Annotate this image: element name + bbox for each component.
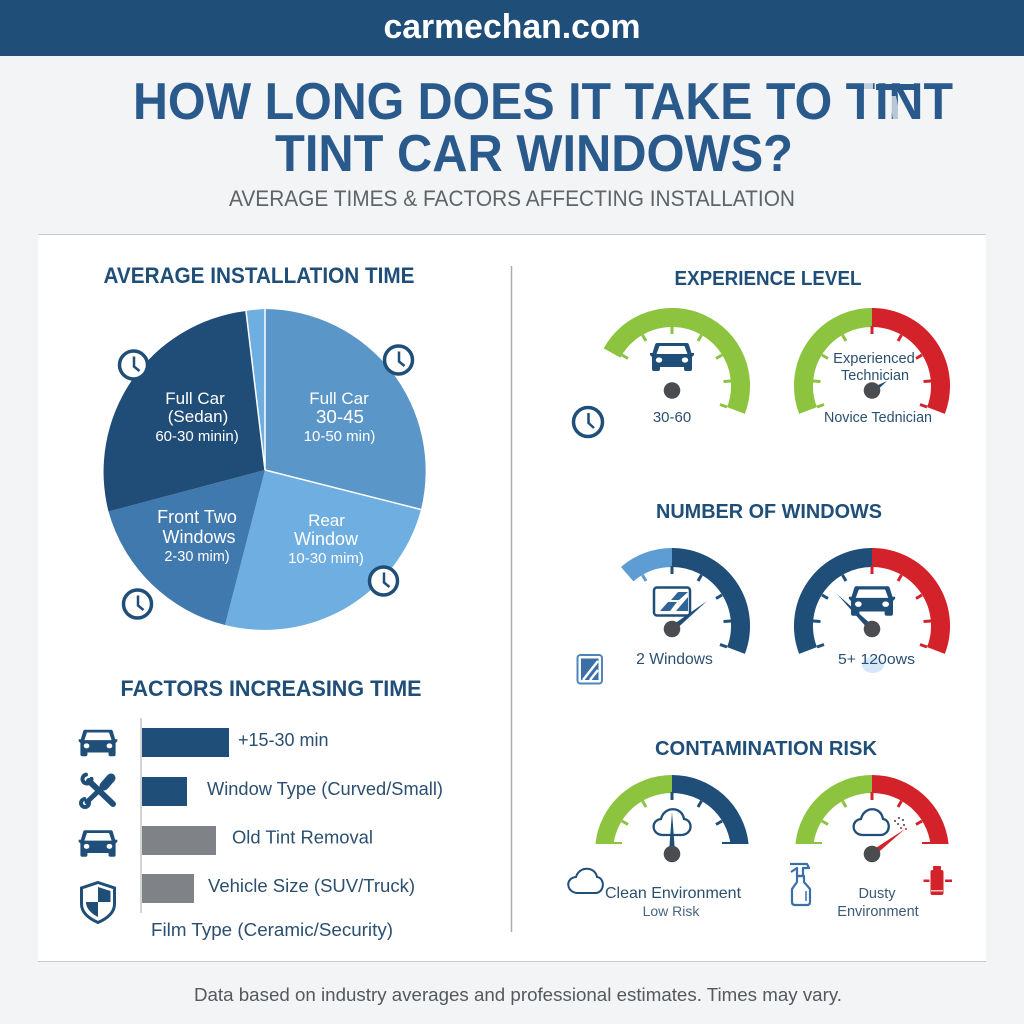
pie chart: 10-30 mim) <box>288 550 364 567</box>
gauge: dusty environment <box>795 775 949 862</box>
label: clean environment: Low Risk <box>643 903 700 919</box>
label: 30-60: 30-60 <box>653 409 691 426</box>
pie chart: Full Car <box>165 389 225 408</box>
icon: spray bottle <box>790 864 810 905</box>
heading: number of windows: NUMBER OF WINDOWS <box>656 501 882 523</box>
subtitle: AVERAGE TIMES & FACTORS AFFECTING INSTALLATION <box>229 186 795 211</box>
pie chart: 10-50 min) <box>304 428 375 445</box>
heading: average installation time: AVERAGE INSTALLATION TIME <box>104 263 414 288</box>
pie chart <box>104 309 426 630</box>
heading: factors increasing time: FACTORS INCREASING TIME <box>120 676 422 701</box>
title: HOW LONG DOES IT TAKE TO TINT <box>133 73 953 131</box>
bar chart: factors: +15-30 min <box>238 730 329 750</box>
bar chart: factors: Old Tint Removal <box>232 828 373 848</box>
label: dusty environment: Dusty <box>858 886 896 902</box>
gauge needle: clean <box>664 812 680 862</box>
pie chart: (Sedan) <box>168 407 228 426</box>
pie chart: Windows <box>162 527 236 547</box>
icon: window <box>654 588 690 616</box>
icon: cloud <box>654 809 691 835</box>
icon: shield <box>82 882 114 922</box>
main panel <box>38 234 986 962</box>
bar chart: factors: Vehicle Size (SUV/Truck) <box>208 876 415 896</box>
icon: dust cloud <box>854 809 907 835</box>
icon: car <box>79 730 117 756</box>
pie chart: 2-30 mim) <box>164 549 230 565</box>
label: technicians <box>824 351 932 426</box>
icon: car in gauge <box>650 343 694 371</box>
icon: clock outline <box>574 408 602 436</box>
title <box>133 73 953 183</box>
label: dusty environment <box>837 886 919 920</box>
icon: small window <box>578 655 602 684</box>
heading: experience level: EXPERIENCE LEVEL <box>674 268 862 290</box>
icon: red canister <box>924 866 952 895</box>
label: 2 windows: 2 Windows <box>636 651 713 668</box>
label: technicians: Experienced <box>833 351 915 367</box>
icon: car in gauge <box>849 586 895 616</box>
pie chart: 60-30 minin) <box>155 428 239 445</box>
label: 5+ windows: 5+ 120ows <box>838 651 915 668</box>
label: technicians: Novice Tednician <box>824 410 932 426</box>
pie chart: 30-45 <box>316 407 364 427</box>
bar chart: factors: Window Type (Curved/Small) <box>207 779 443 799</box>
label: clean environment <box>605 885 742 919</box>
gauge: experience left <box>612 317 741 410</box>
pie chart: Rear <box>308 511 345 530</box>
heading: contamination risk: CONTAMINATION RISK <box>655 738 878 760</box>
footer note: Data based on industry averages and professional estimates. Times may vary. <box>194 985 842 1005</box>
icon: wrench and screwdriver <box>81 774 113 807</box>
icon: clock lower left <box>124 590 152 618</box>
top banner: carmechan.com <box>384 8 640 46</box>
label: technicians: Technician <box>841 368 909 384</box>
label: dusty environment: Environment <box>837 904 919 920</box>
bar chart: factors <box>141 718 443 940</box>
icon: clock top right <box>384 346 412 374</box>
pie chart: Window <box>294 529 359 549</box>
label: clean environment: Clean Environment <box>605 885 742 902</box>
pie chart: Front Two <box>157 507 237 527</box>
pie chart: Full Car <box>309 389 369 408</box>
icon: car <box>79 830 117 857</box>
gauge: five plus windows <box>803 558 941 650</box>
gauge: experience right <box>803 317 941 410</box>
gauge: two windows <box>627 558 741 650</box>
icon: cloud outline <box>568 869 603 893</box>
gauge: clean environment <box>595 775 749 844</box>
bar chart: factors: Film Type (Ceramic/Security) <box>151 920 393 940</box>
top banner <box>0 0 1024 56</box>
icon: clock lower right <box>370 567 398 595</box>
title: TINT CAR WINDOWS? <box>275 125 793 183</box>
icon: clock top left <box>120 351 148 379</box>
